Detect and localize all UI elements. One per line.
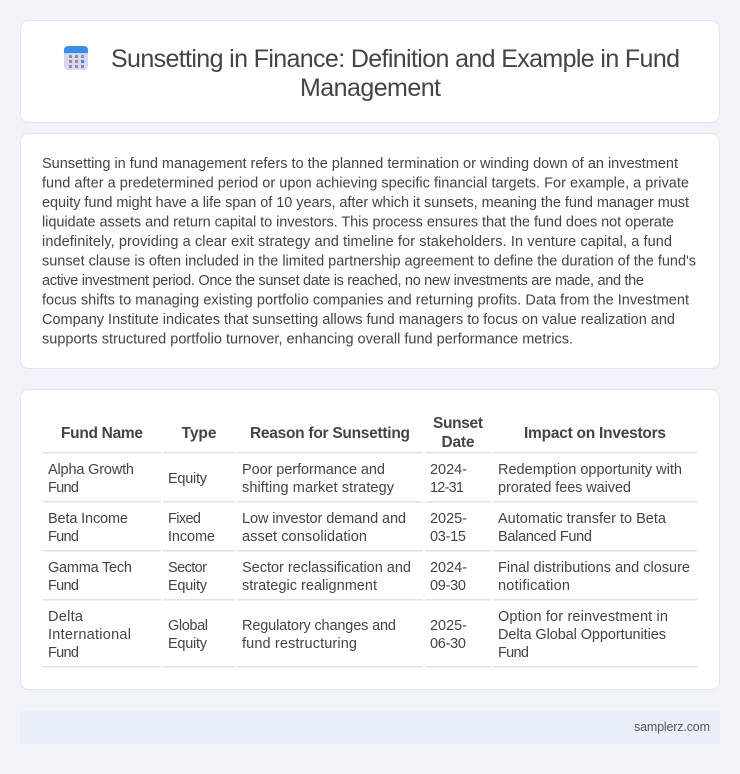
table row: Alpha Growth Fund: 2024- (430, 462, 467, 478)
table row: Delta International Fund: Delta Global Opportunities (498, 627, 666, 643)
table row: Alpha Growth Fund: Equity (168, 471, 208, 487)
table row: Delta International Fund: Option for reinvestment in (498, 609, 668, 625)
table row: Alpha Growth Fund: prorated fees waived (498, 480, 631, 496)
table row: Gamma Tech Fund: strategic realignment (242, 578, 377, 594)
table row: Delta International Fund: International (48, 627, 131, 643)
table header: Sunset (433, 415, 483, 432)
table row: Delta International Fund: Equity (168, 636, 208, 652)
table row: Beta Income Fund: Fund (48, 529, 79, 545)
icon: calendar (64, 46, 88, 70)
text block: description: equity fund might have a life span of 10 years, after which it sunsets, meaning the fund manager must (42, 195, 689, 211)
text block: description: fund after a predetermined period or upon achieving specific financial targets. For example, a private (42, 176, 689, 192)
table header: Reason for Sunsetting (250, 425, 410, 442)
table row: Beta Income Fund: 2025- (430, 511, 467, 527)
table row: Alpha Growth Fund: Poor performance and (242, 462, 385, 478)
text block: description (42, 156, 696, 348)
table row: Beta Income Fund: Balanced Fund (498, 529, 592, 545)
table row: Gamma Tech Fund: Sector (168, 560, 207, 576)
footer bar (20, 711, 720, 744)
text block: description: supports structured portfolio turnover, enhancing overall fund performance metrics. (42, 332, 573, 348)
table header: Fund Name (61, 425, 143, 442)
table row: Delta International Fund: Delta (48, 609, 84, 625)
table header: Impact on Investors (524, 425, 666, 442)
title: Sunsetting in Finance: Definition and Example in Fund (111, 45, 680, 73)
table header: Date (442, 434, 475, 451)
table row: Alpha Growth Fund: shifting market strategy (242, 480, 395, 496)
table row: Alpha Growth Fund: Redemption opportunity with (498, 462, 682, 478)
table row: Beta Income Fund: 03-15 (430, 529, 466, 545)
table row: Delta International Fund: Global (168, 618, 208, 634)
table row: Gamma Tech Fund: Final distributions and closure (498, 560, 690, 576)
table row: Beta Income Fund: Beta Income (48, 511, 128, 527)
panel: title card (20, 20, 720, 122)
table row: Gamma Tech Fund: 2024- (430, 560, 467, 576)
table row: Beta Income Fund (48, 511, 667, 545)
table row: Gamma Tech Fund: Fund (48, 578, 79, 594)
table row: Alpha Growth Fund: Fund (48, 480, 79, 496)
table row: Beta Income Fund: Fixed (168, 511, 201, 527)
panel: fund table (20, 390, 720, 690)
table row: Alpha Growth Fund: Alpha Growth (48, 462, 134, 478)
table row: Alpha Growth Fund (48, 462, 682, 496)
table row: Delta International Fund: Regulatory changes and (242, 618, 396, 634)
footer text: samplerz.com (634, 720, 710, 734)
table row: Delta International Fund (48, 609, 668, 661)
table row: Beta Income Fund: Income (168, 529, 215, 545)
table row: Gamma Tech Fund: Equity (168, 578, 208, 594)
table row: Beta Income Fund: Low investor demand and (242, 511, 406, 527)
table row: Gamma Tech Fund: notification (498, 578, 570, 594)
title (111, 45, 680, 102)
table header: Type (182, 425, 217, 442)
table row: Beta Income Fund: asset consolidation (242, 529, 367, 545)
table row: Delta International Fund: fund restructuring (242, 636, 357, 652)
table row: Delta International Fund: Fund (48, 645, 79, 661)
text block: description: sunset clause is often included in the limited partnership agreement to define the duration of the fund's (42, 254, 696, 270)
table row: Delta International Fund: 2025- (430, 618, 467, 634)
table row: Gamma Tech Fund (48, 560, 690, 594)
text block: description: Sunsetting in fund management refers to the planned termination or winding down of an investment (42, 156, 678, 172)
table row: Delta International Fund: Fund (498, 645, 529, 661)
table row: Alpha Growth Fund: 12-31 (430, 480, 464, 496)
table header (61, 415, 666, 451)
table row: Gamma Tech Fund: 09-30 (430, 578, 466, 594)
text block: description: liquidate assets and return capital to investors. This process ensures that the fund does not operate (42, 214, 674, 230)
table row: Gamma Tech Fund: Gamma Tech (48, 560, 132, 576)
panel: description (20, 134, 720, 368)
text block: description: focus shifts to managing existing portfolio companies and returning profits. Data from the Investment (42, 292, 689, 308)
text block: description: indefinitely, providing a clear exit strategy and timeline for stakeholders. In venture capital, a fund (42, 234, 672, 250)
text block: description: Company Institute indicates that sunsetting allows fund managers to focus on value realization and (42, 312, 675, 328)
text block: description: active investment period. Once the sunset date is reached, no new investments are made, and the (42, 273, 644, 289)
title: Management (300, 74, 441, 102)
table row: Beta Income Fund: Automatic transfer to Beta (498, 511, 667, 527)
table row: Delta International Fund: 06-30 (430, 636, 466, 652)
table row: Gamma Tech Fund: Sector reclassification and (242, 560, 411, 576)
